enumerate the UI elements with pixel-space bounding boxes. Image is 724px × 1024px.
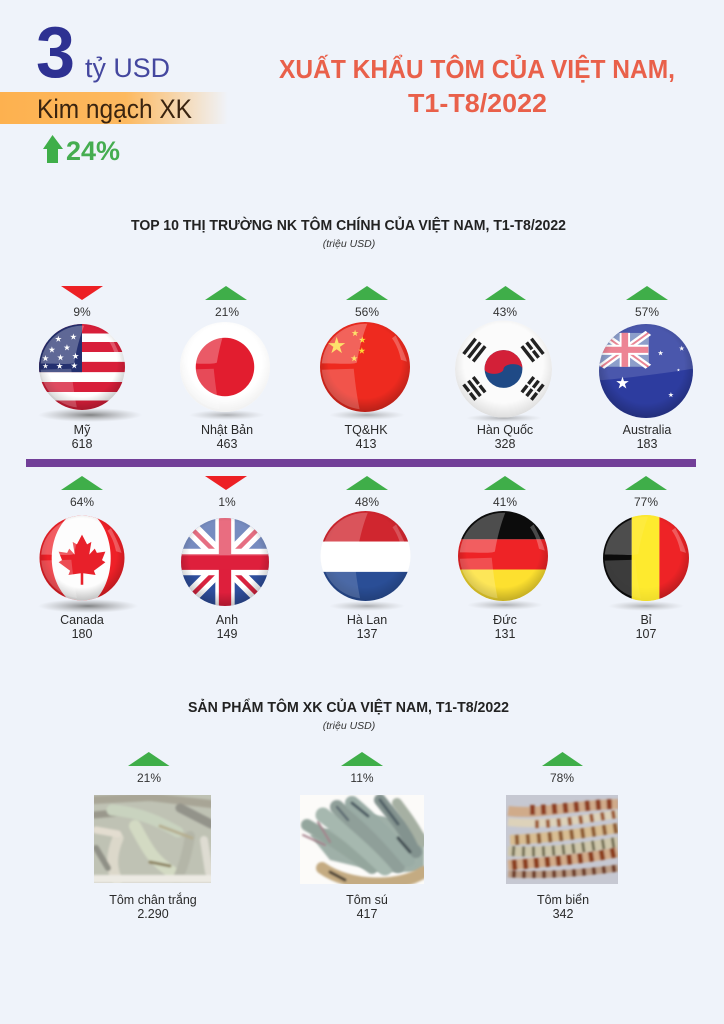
market: Mỹ: Mỹ [74, 423, 91, 437]
panel: shrimp products [94, 752, 618, 921]
market: Canada: Canada [60, 613, 104, 627]
product: Tôm biển: 342 [553, 907, 573, 921]
market: Hàn Quốc [455, 286, 552, 451]
heading: shrimp products: (triệu USD) [323, 720, 375, 732]
market: Bỉ [603, 476, 689, 641]
market: Anh: Anh [216, 613, 238, 627]
photo: white-leg shrimp [94, 795, 211, 883]
market: Nhật Bản: 463 [217, 437, 237, 451]
market: TQ&HK [320, 286, 410, 451]
market: Anh: 1% [218, 495, 236, 509]
photo: sea shrimp [506, 795, 618, 884]
product: Tôm sú: 11% [350, 771, 374, 785]
product: Tôm chân trắng [94, 752, 211, 921]
product: Tôm biển [506, 752, 618, 921]
market: Anh [181, 476, 269, 641]
heading: shrimp products [188, 698, 509, 732]
product: Tôm sú: Tôm sú [346, 893, 388, 907]
market: Australia [599, 286, 693, 451]
panel: markets row 1 [38, 286, 693, 451]
title: T1-T8/2022 [408, 88, 547, 118]
market: Đức: 41% [493, 495, 517, 509]
market: Mỹ: 618 [72, 437, 92, 451]
market: Australia: Australia [623, 423, 671, 437]
growth figure: 24% [66, 136, 120, 166]
market: Mỹ [38, 286, 142, 451]
orange label bar [0, 92, 228, 124]
market: Australia: 183 [637, 437, 657, 451]
product: Tôm chân trắng: 21% [137, 771, 161, 785]
product: Tôm biển: Tôm biển [537, 893, 589, 907]
market: Hà Lan: 48% [355, 495, 379, 509]
market: Nhật Bản: 21% [215, 305, 239, 319]
panel: markets row 2 [38, 476, 689, 641]
market: Nhật Bản: Nhật Bản [201, 423, 253, 437]
photo: tiger shrimp [300, 795, 424, 884]
market: Canada [38, 476, 138, 641]
heading: top 10 markets [131, 216, 566, 250]
panel: headline figure [0, 13, 228, 166]
market: Hà Lan: Hà Lan [347, 613, 387, 627]
market: Hàn Quốc: 328 [495, 437, 515, 451]
market: Hàn Quốc: Hàn Quốc [477, 423, 533, 437]
product: Tôm sú [300, 752, 424, 921]
market: Mỹ: 9% [73, 305, 91, 319]
unit: tỷ USD [85, 53, 170, 83]
icon: up arrow [43, 135, 63, 163]
title: XUẤT KHẨU TÔM CỦA VIỆT NAM, [279, 53, 675, 84]
market: Nhật Bản [180, 286, 270, 451]
market: Anh: 149 [217, 627, 237, 641]
market: Bỉ: 107 [636, 627, 656, 641]
market: Đức: 131 [495, 627, 515, 641]
market: TQ&HK: TQ&HK [344, 423, 388, 437]
market: Đức: Đức [493, 613, 517, 627]
market: TQ&HK: 413 [356, 437, 376, 451]
market: Canada: 180 [72, 627, 92, 641]
title [279, 53, 675, 118]
big number: 3 [36, 13, 75, 93]
heading: shrimp products: SẢN PHẨM TÔM XK CỦA VIỆT NAM, T1-T8/2022 [188, 698, 509, 716]
market: Bỉ: Bỉ [640, 613, 652, 627]
market: Hà Lan [320, 476, 410, 641]
market: Canada: 64% [70, 495, 94, 509]
bar label: Kim ngạch XK [37, 94, 192, 124]
market: Hàn Quốc: 43% [493, 305, 517, 319]
market: Đức [458, 476, 548, 641]
market: TQ&HK: 56% [355, 305, 379, 319]
heading: top 10 markets: TOP 10 THỊ TRƯỜNG NK TÔM CHÍNH CỦA VIỆT NAM, T1-T8/2022 [131, 216, 566, 234]
heading: top 10 markets: (triệu USD) [323, 238, 375, 250]
divider bar [26, 459, 696, 467]
market: Australia: 57% [635, 305, 659, 319]
market: Hà Lan: 137 [357, 627, 377, 641]
product: Tôm biển: 78% [550, 771, 574, 785]
product: Tôm sú: 417 [357, 907, 377, 921]
product: Tôm chân trắng: Tôm chân trắng [109, 892, 197, 907]
market: Bỉ: 77% [634, 495, 658, 509]
product: Tôm chân trắng: 2.290 [137, 907, 169, 921]
